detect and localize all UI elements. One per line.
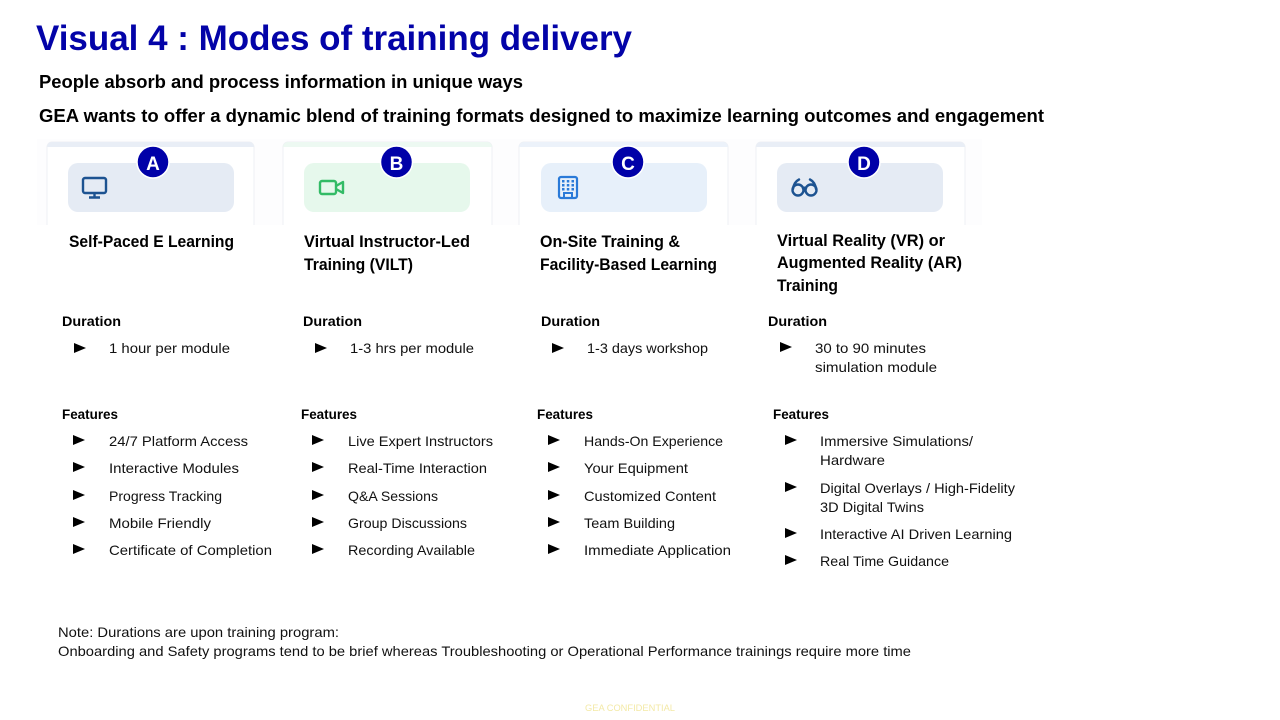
heading: VR or AR training (777, 231, 962, 295)
column B features: Real-Time Interaction (348, 460, 487, 476)
column A duration: 1 hour per module (109, 340, 230, 356)
column A features: 24/7 Platform Access (109, 433, 248, 449)
heading: VILT: Virtual Instructor-Led (304, 232, 470, 251)
column C features: Your Equipment (584, 460, 688, 476)
column B duration (303, 313, 474, 356)
column A features: Certificate of Completion (109, 542, 272, 558)
badge C: C (621, 154, 635, 175)
icon: building (559, 177, 577, 198)
heading: VR or AR training: Virtual Reality (VR) or (777, 231, 945, 250)
column A features (62, 406, 272, 558)
column C duration (541, 313, 708, 356)
column A features: Interactive Modules (109, 460, 239, 476)
note: Note: Durations are upon training program: (58, 624, 339, 640)
column D duration (768, 313, 937, 375)
column C features: Customized Content (584, 488, 716, 504)
panel: card D VR/AR training (756, 142, 965, 225)
heading: VR or AR training: Augmented Reality (AR) (777, 253, 962, 272)
column C duration: Duration (541, 313, 600, 329)
column D features: Features (773, 406, 829, 422)
column C features: Team Building (584, 515, 675, 531)
column D features: 3D Digital Twins (820, 499, 924, 515)
badge A (137, 146, 169, 178)
column A features: Features (62, 406, 118, 422)
column B features: Features (301, 406, 357, 422)
subtitle line 2: GEA wants to offer a dynamic blend of training formats designed to maximize learning outcomes and engagement (39, 106, 1044, 126)
column C features (537, 406, 731, 558)
column D features: Immersive Simulations/ (820, 433, 973, 449)
badge A: A (146, 154, 160, 175)
column D duration: simulation module (815, 359, 937, 375)
heading: self-paced e learning: Self-Paced E Learning (69, 232, 234, 251)
icon: glasses (792, 180, 816, 196)
column B duration: 1-3 hrs per module (350, 340, 474, 356)
column D features: Hardware (820, 452, 885, 468)
column A features: Progress Tracking (109, 488, 222, 504)
icon: video camera (320, 181, 343, 194)
icon: monitor (83, 178, 106, 198)
column B features (301, 406, 493, 558)
column D features: Real Time Guidance (820, 553, 949, 569)
panel: card A self-paced e-learning (47, 142, 254, 225)
column D duration: Duration (768, 313, 827, 329)
note (58, 624, 911, 659)
column C features: Features (537, 406, 593, 422)
badge B: B (390, 154, 403, 175)
heading: VILT: Training (VILT) (304, 255, 413, 274)
heading: on-site training (540, 232, 717, 274)
column C features: Hands-On Experience (584, 433, 723, 449)
column B features: Live Expert Instructors (348, 433, 493, 449)
badge C (612, 146, 644, 178)
badge B (380, 146, 412, 178)
column C duration: 1-3 days workshop (587, 340, 708, 356)
column A duration (62, 313, 230, 356)
footer: confidentiality mark: GEA CONFIDENTIAL (585, 703, 675, 713)
column D features (773, 406, 1015, 569)
column D duration: 30 to 90 minutes (815, 340, 926, 356)
badge D: D (857, 154, 871, 175)
heading: VR or AR training: Training (777, 276, 838, 295)
column A duration: Duration (62, 313, 121, 329)
badge D (848, 146, 880, 178)
column A features: Mobile Friendly (109, 515, 211, 531)
column D features: Interactive AI Driven Learning (820, 526, 1012, 542)
heading: on-site training: On-Site Training & (540, 232, 680, 251)
column C features: Immediate Application (584, 542, 731, 558)
column B features: Group Discussions (348, 515, 467, 531)
column B features: Q&A Sessions (348, 488, 438, 504)
column B features: Recording Available (348, 542, 475, 558)
note: Onboarding and Safety programs tend to be brief whereas Troubleshooting or Operational Performance trainings require more time (58, 643, 911, 659)
panel: card B virtual instructor-led (283, 142, 492, 225)
subtitle line 1: People absorb and process information in unique ways (39, 72, 523, 92)
heading: on-site training: Facility-Based Learning (540, 255, 717, 274)
panel: card C on-site training (519, 142, 728, 225)
column B duration: Duration (303, 313, 362, 329)
heading: VILT (304, 232, 470, 274)
title: Visual 4 : Modes of training delivery (36, 19, 633, 58)
column D features: Digital Overlays / High-Fidelity (820, 480, 1015, 496)
